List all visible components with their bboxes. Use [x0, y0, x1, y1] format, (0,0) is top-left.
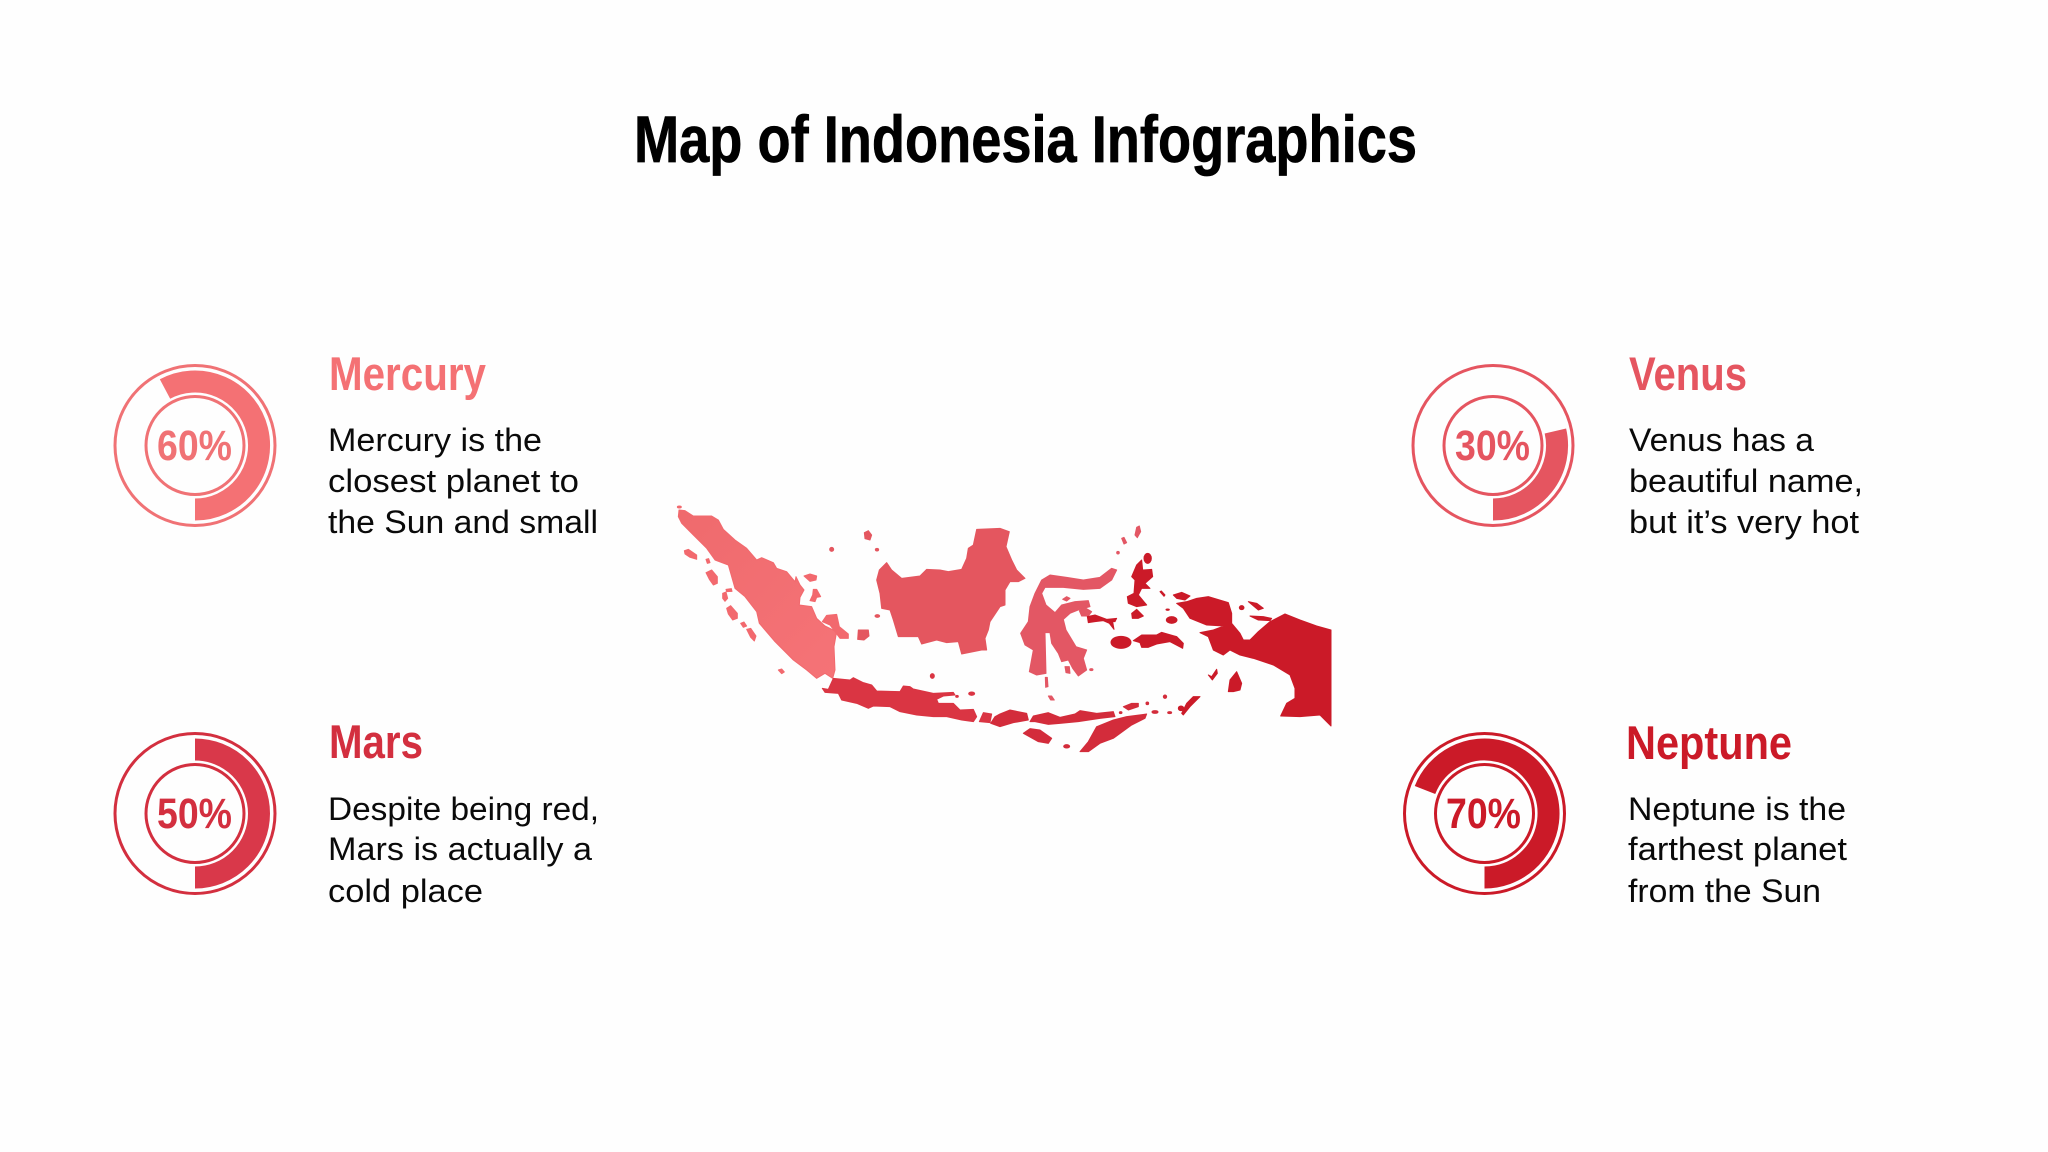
- text: Mercury description: closest planet to: [328, 463, 579, 499]
- text: Mars description: cold place: [328, 873, 483, 909]
- region: Sulawesi: [1021, 526, 1141, 700]
- donut chart: Mercury 60%: [115, 366, 275, 526]
- text: Mercury description: Mercury is the: [328, 422, 542, 458]
- heading: Mercury: Mercury: [329, 347, 486, 400]
- heading: Mars: Mars: [329, 715, 423, 768]
- region: Maluku and Papua: [1087, 553, 1331, 726]
- region: Lesser Sunda islands: [991, 695, 1172, 752]
- heading: Neptune: Neptune: [1626, 716, 1792, 769]
- donut chart: Venus 30%: 30%: [1455, 422, 1530, 470]
- text: Mercury description: the Sun and small: [328, 504, 598, 540]
- heading: Venus: Venus: [1629, 347, 1747, 400]
- panel: Mercury: [115, 347, 598, 540]
- title: Map of Indonesia Infographics: [634, 102, 1417, 176]
- region: Sumatra: [677, 506, 848, 678]
- panel: Neptune: [1404, 716, 1847, 909]
- text: Mars description: Mars is actually a: [328, 831, 592, 867]
- text: Mercury description: [328, 422, 598, 540]
- text: Venus description: but it’s very hot: [1629, 504, 1859, 540]
- text: Neptune description: [1628, 791, 1847, 909]
- map of Indonesia: [677, 506, 1331, 752]
- text: Mars description: [328, 791, 599, 909]
- panel: Mars: [115, 715, 599, 909]
- region: Java and Bali: [822, 674, 992, 723]
- donut chart: Venus 30%: [1413, 366, 1573, 526]
- panel: Venus: [1413, 347, 1863, 540]
- donut chart: Mercury 60%: 60%: [157, 422, 232, 470]
- text: Neptune description: Neptune is the: [1628, 791, 1846, 827]
- text: Venus description: [1629, 422, 1863, 540]
- text: Venus description: beautiful name,: [1629, 463, 1863, 499]
- region: Kalimantan and nearby islands: [830, 528, 1025, 654]
- text: Venus description: Venus has a: [1629, 422, 1814, 458]
- donut chart: Neptune 70%: 70%: [1446, 790, 1521, 838]
- donut chart: Mars 50%: [115, 734, 275, 894]
- text: Neptune description: from the Sun: [1628, 873, 1821, 909]
- text: Neptune description: farthest planet: [1628, 831, 1847, 867]
- donut chart: Neptune 70%: [1404, 734, 1564, 894]
- donut chart: Mars 50%: 50%: [157, 790, 232, 838]
- text: Mars description: Despite being red,: [328, 791, 599, 827]
